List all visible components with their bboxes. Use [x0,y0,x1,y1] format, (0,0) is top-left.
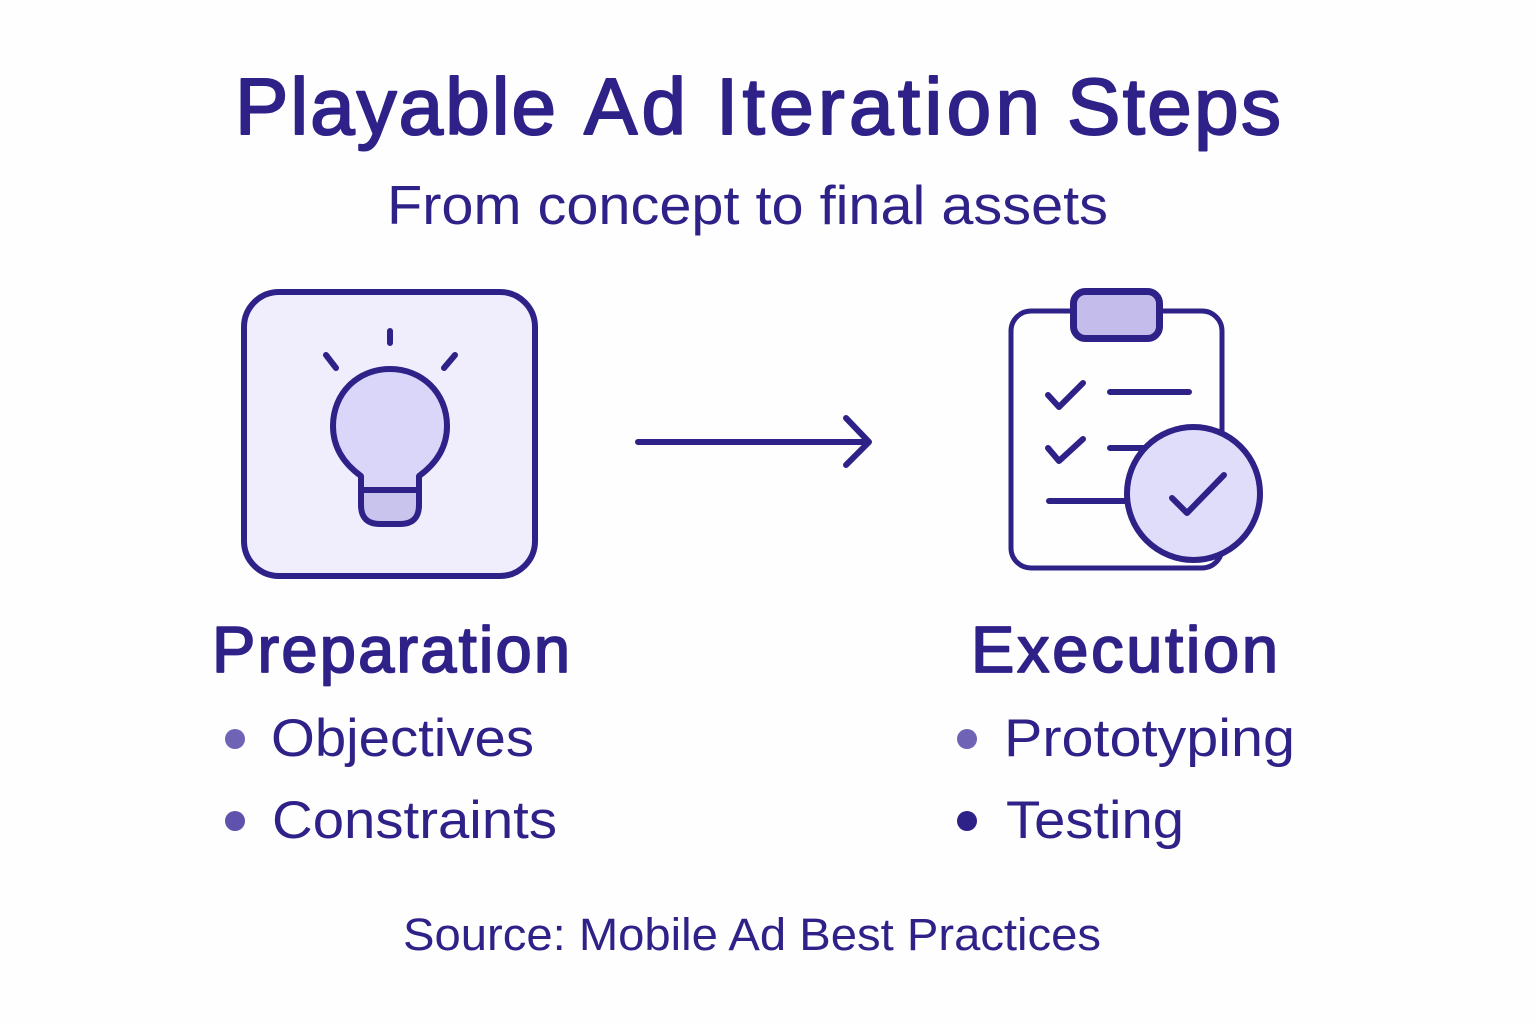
icon: clipboard checklist [1011,292,1260,568]
source note: Source: Mobile Ad Best Practices [403,909,1101,960]
title: Ad [584,62,686,151]
list: preparation items: Constraints [272,791,557,850]
list: execution items: Prototyping [1004,709,1295,768]
list: execution items [957,709,1295,850]
heading: execution: Execution [971,613,1278,686]
list: execution items: Testing [1006,791,1184,850]
title: Steps [1067,62,1281,151]
icon: light bulb panel [244,292,535,576]
list: preparation items [225,709,557,850]
arrow [638,418,869,465]
title: Iteration [716,62,1040,151]
title: Playable [235,62,556,151]
subtitle: From concept to final assets [387,174,1108,236]
list: preparation items: Objectives [271,709,534,768]
heading: preparation: Preparation [212,613,570,686]
